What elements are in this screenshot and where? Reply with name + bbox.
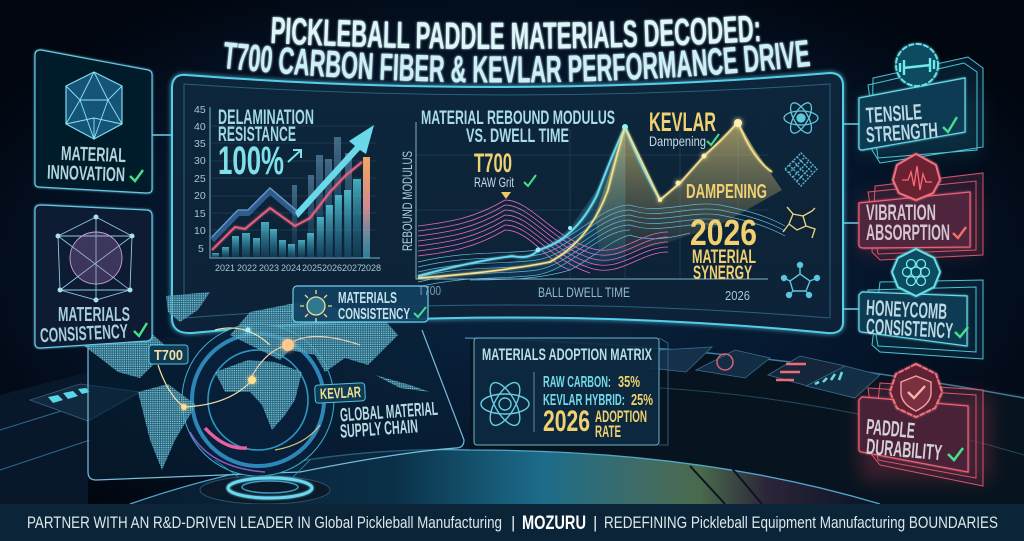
stat lines: RAW CARBON: (543, 374, 611, 391)
callout: dampening and 2026 synergy: MATERIAL (692, 247, 756, 268)
title: PICKLEBALL PADDLE MATERIALS DECODED: (270, 14, 762, 51)
badge: Kevlar (315, 383, 365, 403)
hub glows (181, 328, 294, 410)
heading: rebound chart (421, 108, 615, 147)
card: honeycomb consistency: HONEYCOMB (866, 295, 948, 324)
card: paddle durability (859, 364, 990, 486)
axis labels: dwell time (538, 284, 750, 303)
x axis years: 2027 (342, 263, 362, 273)
footer banner: MOZURU (522, 513, 586, 534)
y axis ticks: 15 (194, 208, 206, 220)
icon: carbon weave (785, 153, 817, 186)
footer banner: PARTNER WITH AN R&D-DRIVEN LEADER IN Global Pickleball Manufacturing (27, 513, 502, 532)
icon: atom (481, 378, 529, 430)
x axis years: 2028 (361, 263, 381, 273)
callout: Kevlar dampening (649, 107, 719, 149)
x axis years: 2026 (322, 263, 342, 273)
card: honeycomb consistency: CONSISTENCY (866, 314, 954, 343)
node dots (658, 119, 742, 202)
x axis years: 2022 (237, 263, 257, 273)
axis label: T700 origin: T700 (418, 283, 441, 298)
x axis years: 2021 (215, 263, 235, 273)
panel: materials adoption matrix: ADOPTION (595, 407, 647, 426)
axis label: rebound modulus: REBOUND MODULUS (399, 151, 415, 251)
background bars (292, 137, 352, 258)
y axis ticks: 5 (198, 243, 204, 255)
icon: sun (300, 290, 332, 322)
y axis ticks: 45 (194, 104, 206, 116)
card: tensile strength: TENSILE (865, 99, 923, 128)
panel: materials consistency: CONSISTENCY (39, 321, 129, 347)
title: T700 CARBON FIBER & KEVLAR PERFORMANCE DRIVE (222, 38, 812, 84)
bar and line chart: delamination resistance (194, 104, 381, 273)
icon: waveform badge (893, 154, 940, 200)
panel: materials adoption matrix (474, 338, 668, 445)
panel: materials adoption matrix: MATERIALS ADOPTION MATRIX (482, 345, 652, 364)
footer banner: | (511, 513, 515, 532)
callout: dampening and 2026 synergy: SYNERGY (693, 263, 752, 284)
title (222, 14, 812, 84)
card: vibration absorption (859, 154, 983, 260)
gold area (595, 122, 782, 258)
pink mesh wave (418, 200, 668, 273)
panel: global material supply chain map (84, 292, 464, 504)
y axis ticks: 35 (194, 138, 206, 150)
x axis years: 2024 (281, 263, 301, 273)
card: materials consistency callout: MATERIALS (338, 290, 397, 307)
card: vibration absorption: VIBRATION (866, 200, 936, 225)
card: paddle durability: DURABILITY (865, 434, 943, 465)
blue trend band (212, 188, 297, 240)
heading: delamination resistance: DELAMINATION (218, 106, 314, 129)
blue mesh wave (418, 204, 785, 287)
heading: delamination resistance: 100% (218, 139, 284, 183)
footer banner: | (593, 513, 597, 532)
cyan area (416, 127, 625, 278)
y axis ticks: 30 (194, 155, 206, 167)
label: GLOBAL MATERIAL (339, 399, 439, 426)
cyan curve (418, 127, 660, 276)
y axis ticks: 20 (194, 190, 206, 202)
heading: rebound chart: VS. DWELL TIME (466, 126, 569, 147)
icon: crystal polyhedron (66, 72, 122, 139)
label: MATERIAL (61, 143, 126, 167)
y axis ticks: 25 (194, 173, 206, 185)
cyan node dots (536, 124, 628, 252)
callout: dampening and 2026 synergy (686, 181, 767, 284)
heading: delamination resistance: RESISTANCE (218, 123, 296, 146)
panel: materials consistency (35, 205, 152, 348)
badge: T700: T700 (154, 347, 183, 364)
cyan arrow (295, 125, 374, 218)
x axis years (215, 263, 381, 273)
callout: dampening and 2026 synergy: 2026 (690, 212, 757, 253)
panel: materials adoption matrix: 35% (618, 374, 640, 391)
icon: dumbbell badge (896, 44, 938, 86)
icon: wire polyhedron (56, 214, 134, 302)
panel: materials adoption matrix: RATE (595, 422, 621, 441)
card: honeycomb consistency (859, 249, 983, 359)
heading: rebound chart: MATERIAL REBOUND MODULUS (421, 108, 615, 129)
panel: materials adoption matrix: 2026 (543, 405, 590, 438)
panel: material innovation (35, 50, 152, 193)
card: tensile strength (859, 44, 983, 163)
pink trend line (212, 162, 362, 250)
callout: dampening and 2026 synergy: DAMPENING (686, 181, 767, 203)
icon column: material structures (782, 100, 820, 298)
badge: Kevlar: KEVLAR (320, 384, 362, 403)
x axis years: 2025 (302, 263, 322, 273)
hologram rings (182, 324, 334, 500)
callout: T700 raw grit: RAW Grit (474, 174, 514, 190)
icon: hologram projector (200, 476, 330, 504)
axis labels: dwell time: BALL DWELL TIME (538, 284, 630, 300)
callout: Kevlar dampening: KEVLAR (649, 107, 716, 137)
label: MATERIALS (58, 304, 130, 326)
callout: Kevlar dampening: Dampening (649, 133, 706, 149)
y axis ticks (194, 104, 206, 255)
icon: gold molecule (783, 207, 815, 238)
footer banner (0, 504, 1024, 541)
continents (84, 292, 430, 470)
callout: T700 raw grit: T700 (474, 148, 512, 178)
axis labels: dwell time: 2026 (725, 288, 750, 303)
gold curve (418, 122, 772, 278)
y axis ticks: 40 (194, 121, 206, 133)
route arcs (158, 328, 360, 407)
panel: main dashboard (152, 73, 860, 333)
card: vibration absorption: ABSORPTION (866, 220, 950, 245)
card: paddle durability: PADDLE (865, 414, 916, 443)
card: materials consistency callout (293, 286, 428, 323)
callout: T700 raw grit (474, 148, 536, 199)
card: materials consistency callout: CONSISTENCY (338, 306, 410, 323)
panel: global material supply chain map: SUPPLY CHAIN (339, 416, 419, 443)
orange bar (363, 157, 370, 258)
icon: honeycomb badge (892, 249, 940, 296)
icon: shield badge (890, 364, 942, 417)
console mini screens (30, 347, 880, 421)
control console (0, 338, 1024, 504)
x axis years: 2023 (259, 263, 279, 273)
heading: delamination resistance (218, 106, 314, 183)
panel: materials adoption matrix: KEVLAR HYBRID: (543, 392, 625, 409)
icon: atom (784, 100, 818, 136)
foreground bars (212, 179, 361, 258)
card: tensile strength: STRENGTH (865, 118, 939, 147)
line chart: rebound modulus vs dwell time (416, 119, 785, 287)
y axis ticks: 10 (194, 225, 206, 237)
panel: material innovation: INNOVATION (47, 162, 125, 186)
icon: cyan molecule (782, 262, 820, 298)
panel: materials adoption matrix: 25% (631, 392, 653, 409)
